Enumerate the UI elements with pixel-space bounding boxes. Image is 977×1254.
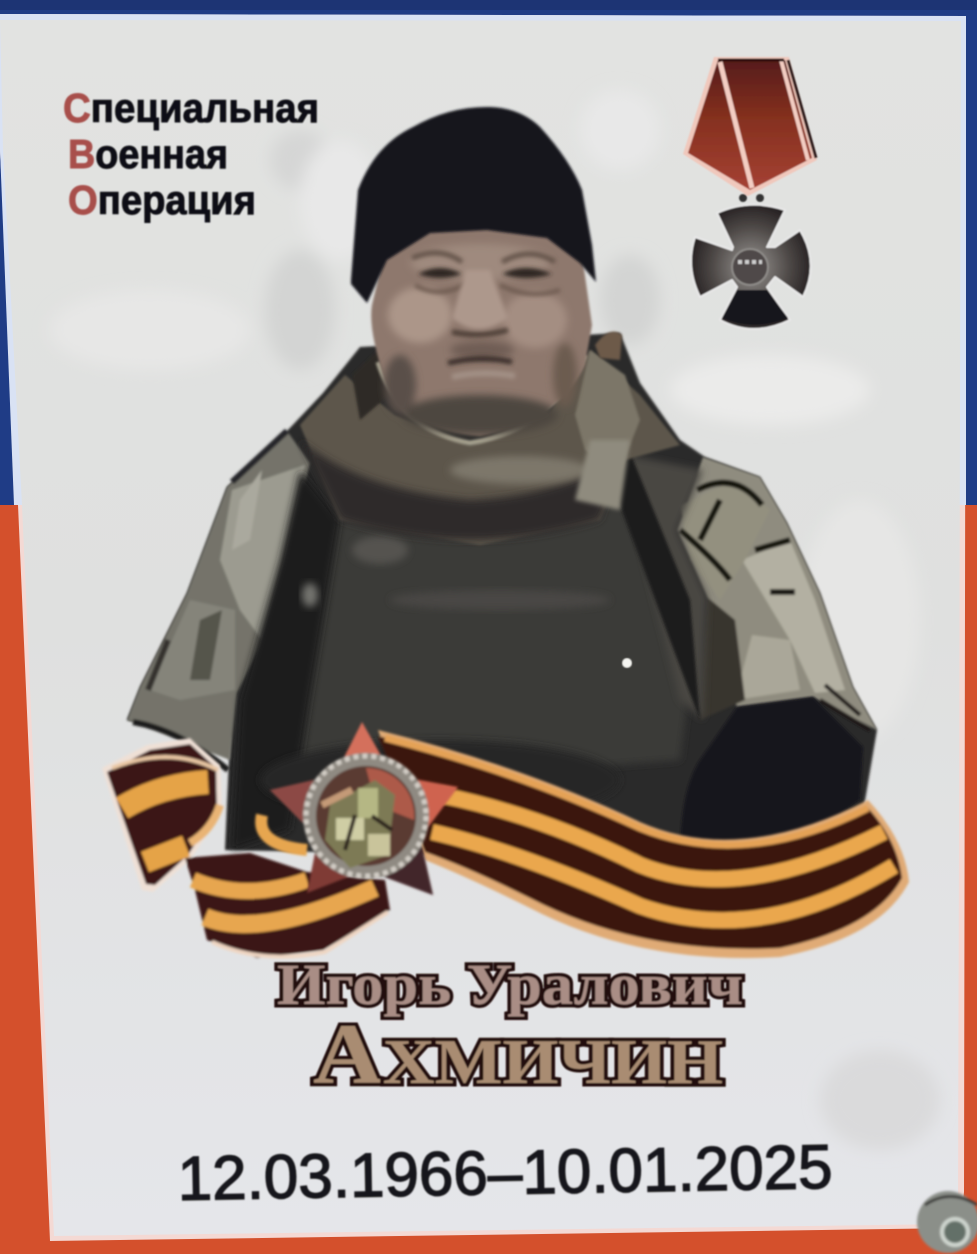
ribbon tail left xyxy=(102,738,222,892)
black glove xyxy=(680,697,863,860)
red star xyxy=(270,722,458,895)
dates: 12.03.1966–10.01.2025 xyxy=(177,1133,833,1214)
icon: pin xyxy=(917,1191,977,1253)
icon: order medal xyxy=(683,57,817,329)
left sleeve camouflage xyxy=(127,431,310,770)
collar and scarf xyxy=(300,332,680,545)
surname: АХМИЧИН xyxy=(313,1006,723,1102)
medal ribbon xyxy=(683,57,817,196)
first name and patronymic: Игорь Уралович xyxy=(277,952,743,1017)
St George ribbon xyxy=(102,730,909,958)
eyes and brows xyxy=(412,253,560,294)
tactical vest xyxy=(232,440,707,850)
line: Специальная: Специальная xyxy=(63,85,319,131)
medallion xyxy=(303,753,429,879)
ribbon lower loop xyxy=(185,815,390,958)
line: Операция: Операция xyxy=(68,177,256,223)
medal cross xyxy=(691,194,811,329)
body silhouette xyxy=(127,333,877,860)
nose and mouth xyxy=(448,270,515,377)
heading: СВО xyxy=(63,85,319,223)
portrait: soldier xyxy=(127,107,877,860)
right sleeve camouflage xyxy=(677,457,877,730)
black knit hat xyxy=(351,107,596,303)
ribbon main sweep xyxy=(378,730,909,958)
line: Военная: Военная xyxy=(68,131,228,177)
face xyxy=(371,220,592,436)
order star xyxy=(270,722,458,895)
name block xyxy=(277,952,743,1102)
